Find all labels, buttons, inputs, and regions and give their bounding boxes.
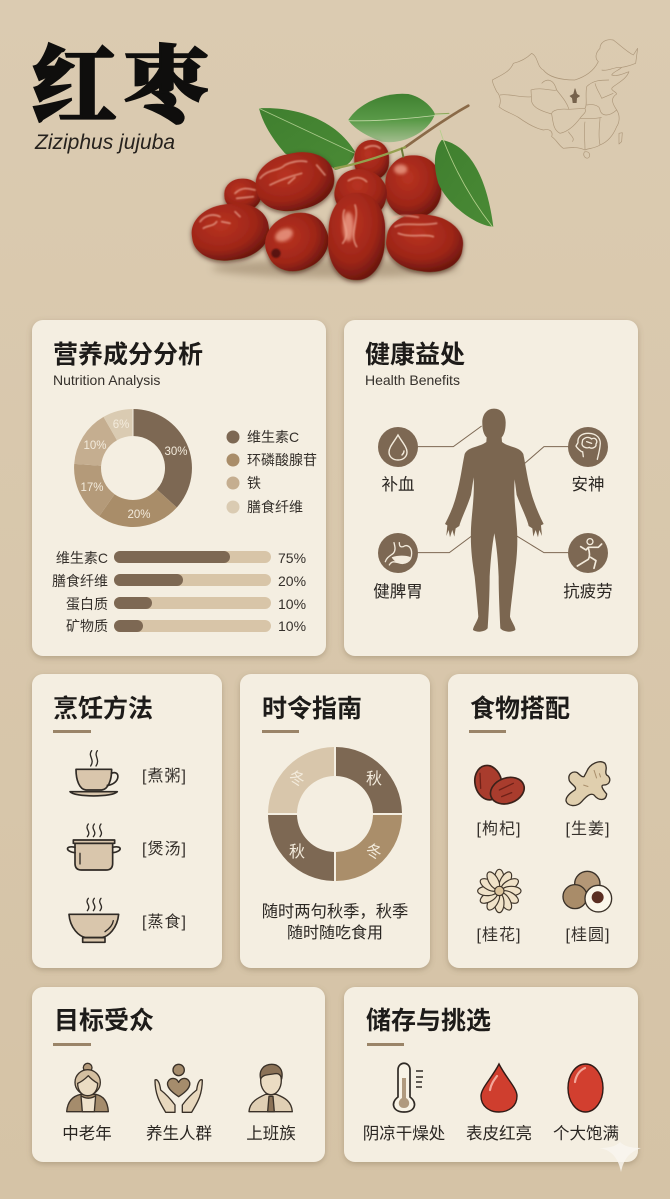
panel: health benefits — [344, 320, 638, 656]
heading: nutrition: 营养成分分析 — [53, 341, 203, 369]
legend: 维生素C — [247, 429, 299, 445]
panel: food pairing — [448, 674, 638, 968]
icon: elderly woman — [67, 1063, 108, 1112]
benefit: blood: 补血 — [382, 475, 414, 494]
leaf left — [259, 108, 355, 170]
donut: seasons — [268, 747, 402, 881]
label: wellness group: 养生人群 — [146, 1124, 212, 1143]
benefit: anti-fatigue — [563, 533, 613, 601]
branch — [335, 106, 468, 168]
panel: storage and selection — [344, 987, 638, 1162]
label: elderly: 中老年 — [62, 1124, 112, 1143]
body silhouette with connectors — [418, 409, 568, 632]
icon: longan — [563, 871, 612, 912]
icon: cup — [70, 751, 118, 796]
icon: red fruits — [472, 763, 528, 808]
heading: storage: 储存与挑选 — [366, 1007, 491, 1035]
bar chart: 20% — [278, 573, 306, 589]
icon: ginger — [566, 762, 610, 806]
panel: nutrition analysis — [32, 320, 326, 656]
donut: seasons: 秋 — [366, 770, 382, 788]
label: ginger: [生姜] — [566, 820, 610, 838]
latin name: Ziziphus jujuba — [34, 131, 175, 154]
bar chart: 蛋白质 — [66, 596, 108, 612]
bar chart: 矿物质 — [66, 618, 108, 634]
icon: red plump fruit — [568, 1064, 603, 1112]
icon: pot — [67, 824, 120, 870]
label: shiny skin: 表皮红亮 — [466, 1124, 532, 1143]
benefit: calm mind: 安神 — [572, 475, 604, 494]
bar chart: 维生素C — [56, 550, 108, 566]
benefit: blood — [378, 427, 418, 494]
heading: seasons: 时令指南 — [262, 695, 362, 723]
leaf right — [435, 130, 493, 227]
legend: 铁 — [247, 475, 261, 491]
subheading: health: Health Benefits — [365, 372, 460, 388]
icon: office worker — [249, 1064, 292, 1112]
donut chart: 30% — [164, 446, 188, 458]
heading: audience: 目标受众 — [54, 1007, 154, 1035]
label: soup: [煲汤] — [142, 840, 187, 858]
watermark sparkle — [599, 1142, 641, 1172]
label: osmanthus: [桂花] — [477, 926, 521, 944]
donut chart: 6% — [113, 419, 129, 431]
bar chart: 10% — [278, 596, 306, 612]
map of China — [492, 40, 638, 158]
label: steamed: [蒸食] — [142, 913, 187, 931]
heading: health: 健康益处 — [365, 341, 465, 369]
icon: thermometer — [393, 1063, 423, 1112]
label: longan: [桂圆] — [566, 926, 610, 944]
icon: caring hands and heart — [155, 1064, 202, 1112]
legend: 膳食纤维 — [247, 499, 303, 515]
seasonal note: 随时两句秋季，秋季 — [262, 903, 408, 921]
heading: pairing: 食物搭配 — [470, 694, 570, 723]
benefit: calm mind — [568, 427, 608, 494]
bar chart: 75% — [278, 550, 306, 566]
donut chart: 20% — [127, 509, 151, 521]
donut chart: 10% — [83, 440, 107, 452]
heading: cooking: 烹饪方法 — [53, 694, 153, 723]
bar chart: 10% — [278, 618, 306, 634]
icon: flower — [478, 869, 521, 913]
donut chart — [74, 409, 192, 527]
benefit: stomach — [373, 533, 423, 601]
icon: bowl — [69, 898, 119, 942]
icon: red drop — [481, 1064, 517, 1112]
jujube fruits — [188, 140, 466, 281]
bar chart: 膳食纤维 — [52, 573, 108, 589]
hero: jujube cluster with leaves — [188, 94, 493, 281]
label: cool dry place: 阴凉干燥处 — [363, 1124, 445, 1143]
donut chart: 17% — [80, 482, 104, 494]
panel: seasonal guide — [240, 674, 430, 968]
label: congee: [煮粥] — [142, 767, 187, 785]
legend: 环磷酸腺苷 — [247, 452, 317, 468]
fruit highlights — [200, 146, 437, 247]
leaf top — [348, 94, 448, 142]
donut: seasons: 冬 — [364, 841, 384, 863]
label: office workers: 上班族 — [246, 1124, 296, 1143]
label: plump size: 个大饱满 — [553, 1124, 619, 1143]
panel: cooking methods — [32, 674, 222, 968]
benefit: anti-fatigue: 抗疲劳 — [563, 582, 613, 601]
donut: seasons: 冬 — [287, 768, 307, 790]
label: goji: [枸杞] — [477, 820, 521, 838]
seasonal note: 随时随吃食用 — [287, 924, 383, 942]
benefit: stomach: 健脾胃 — [373, 582, 423, 601]
panel: target audience — [32, 987, 325, 1162]
donut: seasons: 秋 — [289, 843, 305, 861]
subheading: nutrition: Nutrition Analysis — [53, 372, 160, 388]
seasonal note — [262, 903, 408, 942]
legend — [226, 429, 317, 515]
bar chart — [52, 550, 306, 634]
title: 红枣 — [32, 19, 216, 140]
